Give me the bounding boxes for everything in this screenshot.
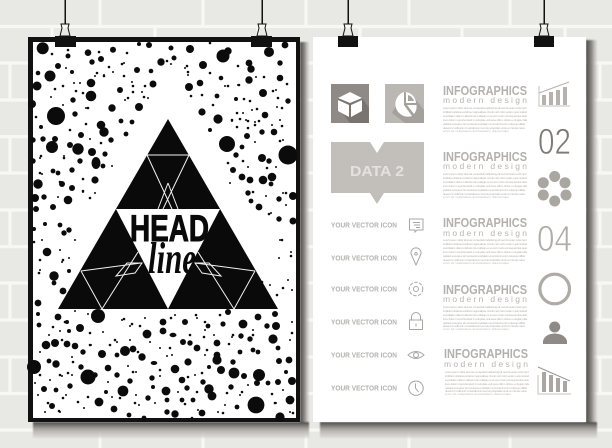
- text block 1: deserunt mollit anim id est laborum sed ut perspiciatis unde omnis iste natus: [443, 126, 526, 130]
- icon: person: [543, 322, 567, 344]
- text block 1: exercitation ullamco laboris nisi ut aliquip ex ea commodo consequat duis aute: [443, 114, 527, 118]
- number 02: 02: [538, 121, 571, 162]
- text block 2: exercitation ullamco laboris nisi ut aliquip ex ea commodo consequat duis aute: [443, 180, 527, 184]
- text block 4: pariatur excepteur sint occaecat cupidatat non proident sunt in culpa qui officia: [443, 321, 525, 325]
- text block 3: INFOGRAPHICS: [443, 215, 527, 230]
- text block 1: [443, 83, 527, 133]
- text block 2: [443, 149, 527, 199]
- vector icon list: [331, 219, 424, 395]
- text block 5: exercitation ullamco laboris nisi ut aliquip ex ea commodo consequat duis aute: [445, 378, 529, 382]
- list row: clock: YOUR VECTOR ICON: [331, 386, 397, 392]
- text block 4: [443, 282, 527, 331]
- icon: pie chart tile: [385, 84, 424, 123]
- text block 4: Lorem ipsum dolor sit amet, consectetur adipiscing elit, sed do eiusmod tempor: [443, 305, 527, 309]
- white inverted centre triangle: [116, 209, 220, 309]
- text block 5: INFOGRAPHICS: [444, 346, 528, 361]
- text block 3: error sit voluptatem accusantium doloremque: [443, 261, 509, 265]
- text block 3: irure dolor in reprehenderit in voluptate velit esse cillum dolore eu fugiat nulla: [443, 250, 527, 254]
- text block 5: deserunt mollit anim id est laborum sed ut perspiciatis unde omnis iste natus: [445, 389, 528, 393]
- list row: message: YOUR VECTOR ICON: [331, 222, 397, 230]
- number 04: 04: [537, 218, 572, 259]
- text block 4: modern design: [443, 294, 527, 304]
- white geometric line work: [81, 155, 255, 309]
- clip: left poster left: [55, 0, 76, 47]
- text block 4: INFOGRAPHICS: [443, 282, 527, 297]
- left poster: white sheet with ink splatter: [27, 42, 298, 422]
- clip: right poster left: [338, 0, 358, 47]
- clip: left poster right: [251, 0, 272, 47]
- text block 1: modern design: [443, 95, 527, 105]
- text block 1: INFOGRAPHICS: [443, 83, 527, 98]
- text block 2: deserunt mollit anim id est laborum sed ut perspiciatis unde omnis iste natus: [443, 192, 526, 196]
- text block 3: modern design: [443, 228, 527, 238]
- binder clips: [55, 0, 554, 47]
- text block 5: modern design: [444, 359, 528, 369]
- text block 2: irure dolor in reprehenderit in voluptate velit esse cillum dolore eu fugiat nulla: [443, 184, 527, 188]
- text block 4: exercitation ullamco laboris nisi ut aliquip ex ea commodo consequat duis aute: [443, 313, 527, 317]
- text block 1: irure dolor in reprehenderit in voluptate velit esse cillum dolore eu fugiat nulla: [443, 118, 527, 122]
- text block 1: pariatur excepteur sint occaecat cupidatat non proident sunt in culpa qui officia: [443, 122, 525, 126]
- text block 1: error sit voluptatem accusantium doloremque: [443, 129, 509, 133]
- text block 4: deserunt mollit anim id est laborum sed ut perspiciatis unde omnis iste natus: [443, 324, 526, 328]
- text block 1: Lorem ipsum dolor sit amet, consectetur adipiscing elit, sed do eiusmod tempor: [443, 106, 527, 110]
- text block 5: error sit voluptatem accusantium doloremque: [445, 392, 511, 396]
- text block 3: incididunt ut labore et dolore magna aliqua. Ut enim ad minim veniam, quis nostrud: [443, 242, 527, 246]
- text block 4: irure dolor in reprehenderit in voluptate velit esse cillum dolore eu fugiat nulla: [443, 317, 527, 321]
- text block 3: [443, 215, 527, 265]
- list row: message: [331, 219, 423, 232]
- text block 5: irure dolor in reprehenderit in voluptate velit esse cillum dolore eu fugiat nulla: [445, 382, 529, 386]
- black triangle: [58, 119, 278, 309]
- left poster: black frame: [28, 37, 300, 422]
- text block 3: Lorem ipsum dolor sit amet, consectetur adipiscing elit, sed do eiusmod tempor: [443, 238, 527, 242]
- callout: data 2: [331, 142, 424, 204]
- text block 2: Lorem ipsum dolor sit amet, consectetur adipiscing elit, sed do eiusmod tempor: [443, 172, 527, 176]
- text block 3: exercitation ullamco laboris nisi ut aliquip ex ea commodo consequat duis aute: [443, 246, 527, 250]
- icon: rising bar chart: [539, 82, 570, 106]
- text block 1: incididunt ut labore et dolore magna aliqua. Ut enim ad minim veniam, quis nostrud: [443, 110, 527, 114]
- text block 5: incididunt ut labore et dolore magna aliqua. Ut enim ad minim veniam, quis nostrud: [445, 374, 529, 378]
- text block 5: Lorem ipsum dolor sit amet, consectetur adipiscing elit, sed do eiusmod tempor: [445, 370, 529, 374]
- left poster shadow: [33, 42, 309, 438]
- text block 5: pariatur excepteur sint occaecat cupidatat non proident sunt in culpa qui officia: [445, 386, 527, 390]
- text block 3: deserunt mollit anim id est laborum sed ut perspiciatis unde omnis iste natus: [443, 258, 526, 262]
- icon: ring: [540, 274, 570, 304]
- list row: gear: [331, 282, 423, 296]
- text block 2: modern design: [443, 161, 527, 171]
- headline text: HEAD: [130, 208, 209, 249]
- list row: clock: [331, 381, 423, 395]
- callout: data 2: DATA 2: [350, 163, 404, 180]
- text block 4: error sit voluptatem accusantium doloremque: [443, 327, 509, 331]
- text block 5: [444, 346, 529, 396]
- list row: location pin: [331, 248, 421, 265]
- list row: gear: YOUR VECTOR ICON: [331, 286, 397, 294]
- text block 2: INFOGRAPHICS: [443, 149, 527, 164]
- list row: location pin: YOUR VECTOR ICON: [331, 256, 397, 262]
- text block 2: incididunt ut labore et dolore magna aliqua. Ut enim ad minim veniam, quis nostrud: [443, 176, 527, 180]
- clip: right poster right: [534, 0, 554, 47]
- icon: cube tile: [331, 84, 369, 123]
- icon: six-node cluster: [538, 171, 572, 206]
- icon: falling bar chart: [538, 367, 571, 394]
- right poster sheet: [313, 37, 586, 422]
- list row: eye: YOUR VECTOR ICON: [331, 352, 397, 360]
- triangle logo: [58, 119, 278, 309]
- list row: eye: [331, 352, 424, 360]
- text block 3: pariatur excepteur sint occaecat cupidatat non proident sunt in culpa qui officia: [443, 254, 525, 258]
- list row: padlock: YOUR VECTOR ICON: [331, 320, 397, 326]
- text block 2: pariatur excepteur sint occaecat cupidatat non proident sunt in culpa qui officia: [443, 188, 525, 192]
- right poster shadow: [320, 40, 597, 438]
- script subhead: line: [148, 234, 196, 283]
- list row: padlock: [331, 312, 422, 330]
- text block 4: incididunt ut labore et dolore magna aliqua. Ut enim ad minim veniam, quis nostrud: [443, 309, 527, 313]
- text block 2: error sit voluptatem accusantium doloremque: [443, 195, 509, 199]
